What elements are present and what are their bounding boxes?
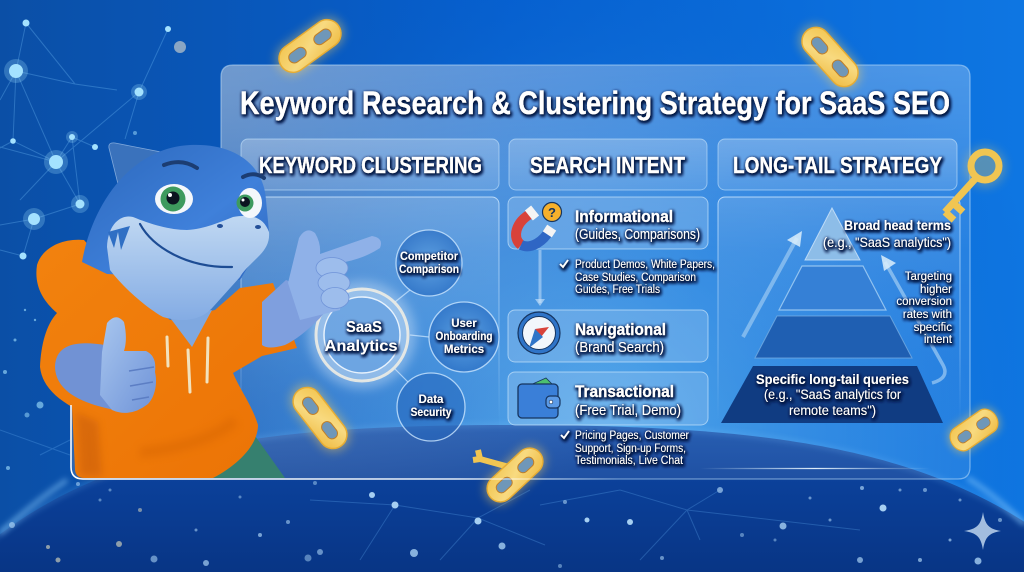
tier: third — [755, 316, 912, 358]
icon: wallet — [518, 378, 560, 418]
gill marks — [108, 226, 130, 250]
label: broad head terms: (e.g., "SaaS analytics") — [823, 235, 951, 250]
muzzle and belly — [107, 216, 269, 320]
icon: magnet with question bubble — [516, 202, 562, 246]
note: targeting: intent — [924, 334, 953, 346]
hoodie body and hood — [36, 240, 297, 478]
tier: second — [779, 266, 886, 310]
mascot: shark in orange hoodie — [36, 143, 381, 478]
column: search intent — [508, 139, 715, 467]
column: long-tail strategy — [718, 139, 960, 429]
label: broad head terms: Broad head terms — [844, 218, 951, 233]
header: search intent — [509, 139, 707, 190]
hoodie hem — [140, 416, 238, 458]
node: user onboarding metrics: Onboarding — [436, 331, 492, 343]
card: transactional: (Free Trial, Demo) — [575, 403, 681, 419]
header: search intent: SEARCH INTENT — [530, 152, 685, 178]
label: broad head terms — [823, 218, 951, 250]
label: specific long-tail queries: remote teams") — [789, 403, 876, 418]
icon: gold key and link bottom — [473, 439, 552, 511]
note: targeting: higher — [920, 284, 952, 296]
neck — [168, 310, 212, 347]
node: data security: Security — [410, 407, 452, 419]
right eye — [236, 188, 262, 218]
node: data security — [397, 373, 465, 441]
card: informational: Informational — [575, 207, 673, 226]
label: specific long-tail queries: Specific long-tail queries — [756, 371, 909, 387]
icon: gold link top left — [270, 11, 350, 81]
list: informational content: Product Demos, White Papers, — [575, 259, 715, 271]
note: targeting: rates with — [903, 309, 952, 321]
note: targeting: conversion — [896, 296, 952, 308]
node: user onboarding metrics: User — [451, 318, 477, 330]
node: SaaS Analytics — [308, 281, 416, 389]
header: keyword clustering: KEYWORD CLUSTERING — [259, 152, 482, 178]
list: informational content — [560, 259, 715, 296]
note: targeting — [896, 271, 953, 346]
icon: gold link lower right — [943, 402, 1005, 458]
card: transactional — [508, 372, 708, 425]
note: targeting: Targeting — [905, 271, 952, 283]
list: informational content: Guides, Free Trials — [575, 284, 660, 296]
header: long-tail strategy: LONG-TAIL STRATEGY — [733, 152, 942, 178]
shark fin — [109, 143, 166, 184]
tier: long-tail — [721, 366, 943, 423]
eyebrows — [164, 162, 264, 178]
curled fingers — [316, 258, 350, 308]
arrow: informational to navigational — [535, 250, 545, 306]
nostrils — [217, 224, 261, 229]
icon: gold link lower left — [284, 378, 356, 458]
node: competitor comparison: Comparison — [399, 264, 459, 276]
left arm and thumbs-up hand — [55, 317, 156, 413]
panel: keyword clustering — [241, 197, 499, 442]
drawstrings — [167, 337, 208, 392]
right arm and pointing hand — [262, 230, 381, 348]
icon: gold link top right — [793, 18, 867, 96]
card: transactional: Transactional — [575, 382, 674, 401]
bright panel edge — [71, 405, 620, 479]
tier: head terms — [805, 208, 860, 260]
card: informational: (Guides, Comparisons) — [575, 227, 700, 243]
node: competitor comparison — [396, 230, 462, 296]
card: navigational: (Brand Search) — [575, 340, 664, 356]
mouth — [140, 224, 232, 267]
panel: long-tail strategy — [718, 197, 960, 429]
node: data security: Data — [419, 394, 444, 406]
list: transactional content: Pricing Pages, Customer — [575, 430, 689, 442]
head — [82, 145, 269, 280]
column: keyword clustering — [241, 139, 499, 442]
glint on panel edge — [700, 468, 930, 470]
network decoration: bottom — [0, 430, 1002, 568]
node: SaaS Analytics: SaaS — [346, 319, 382, 336]
node: competitor comparison: Competitor — [400, 251, 458, 263]
arrow: left rising — [743, 231, 802, 337]
note: targeting: specific — [914, 322, 952, 334]
node: SaaS Analytics: Analytics — [324, 338, 398, 355]
hoodie left shading — [76, 412, 102, 476]
trousers — [213, 433, 285, 478]
left eye — [155, 184, 193, 214]
network decoration: upper left — [0, 23, 168, 256]
connector lines — [395, 290, 429, 382]
icon: magnet with question bubble: ? — [548, 205, 556, 220]
list: transactional content: Testimonials, Live Chat — [575, 455, 684, 467]
list: informational content: Case Studies, Comparison — [575, 272, 696, 284]
list: transactional content: Support, Sign-up Forms, — [575, 443, 686, 455]
watermark: sparkle — [964, 512, 1001, 550]
header: long-tail strategy — [718, 139, 957, 190]
list: transactional content — [561, 430, 689, 467]
arrow: right curved — [881, 255, 945, 383]
icon: compass — [518, 312, 560, 354]
main glass panel — [71, 65, 970, 479]
card: navigational — [508, 310, 708, 362]
icon: gold key right — [945, 147, 1005, 220]
cluster diagram — [308, 230, 499, 441]
node: user onboarding metrics — [429, 302, 499, 372]
card: informational — [508, 197, 708, 249]
header: keyword clustering — [241, 139, 499, 190]
label: specific long-tail queries — [756, 371, 909, 418]
pyramid — [721, 208, 943, 423]
card: navigational: Navigational — [575, 320, 666, 339]
node: user onboarding metrics: Metrics — [444, 344, 484, 356]
network nodes: upper left — [3, 20, 186, 470]
label: specific long-tail queries: (e.g., "SaaS analytics for — [764, 387, 901, 402]
